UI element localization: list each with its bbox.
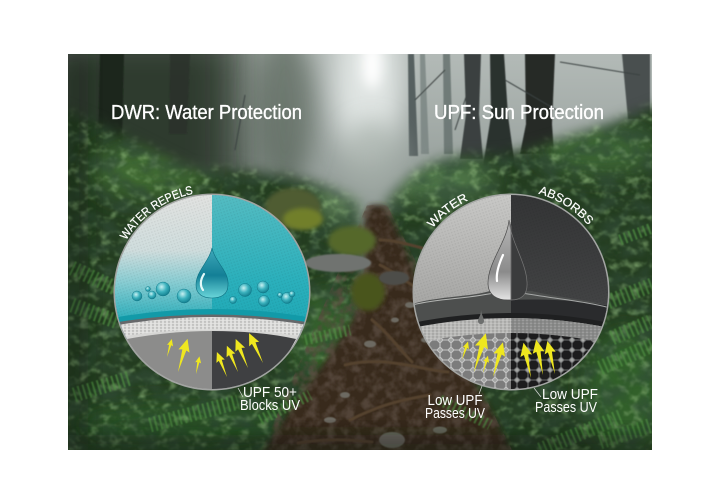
callout: Low UPF Passes UV right: Passes UV — [535, 399, 597, 416]
forest photograph background — [68, 54, 652, 450]
lighter green clusters — [90, 142, 210, 198]
fabric outer left light grey — [414, 195, 511, 286]
speckled middle layer — [420, 318, 602, 342]
UV arrows — [459, 331, 561, 379]
callout: Low UPF Passes UV right — [534, 386, 598, 416]
mossy boulders — [265, 188, 321, 228]
central haze — [340, 120, 404, 200]
UV arrows — [164, 331, 268, 379]
fabric outer right dark grey — [511, 192, 610, 312]
cell layer — [428, 333, 511, 389]
callout: Low UPF Passes UV right: Low UPF — [542, 386, 598, 403]
membrane layers — [112, 309, 313, 330]
dark forest left — [68, 54, 272, 178]
heading: DWR: DWR: Water Protection — [111, 102, 302, 124]
fabric outer right teal — [212, 192, 313, 339]
ferns — [72, 228, 652, 450]
panel: DWR fabric circle — [112, 192, 313, 395]
large water drop — [196, 248, 228, 298]
roots — [298, 240, 448, 443]
callout: UPF 50+ Blocks UV: Blocks UV — [240, 397, 300, 414]
wet layer band — [412, 291, 610, 322]
callout: Low UPF Passes UV left: Low UPF — [428, 392, 482, 409]
water beads — [132, 281, 295, 306]
foliage masses — [68, 98, 652, 450]
dirt trail — [262, 205, 512, 455]
curved label: WATER REPELS: WATER REPELS — [119, 186, 192, 239]
panel: UPF fabric circle — [412, 192, 610, 395]
fog glow — [321, 54, 408, 164]
water drop on fabric — [488, 220, 527, 300]
rocks — [324, 302, 447, 448]
vignette edges — [58, 54, 88, 450]
leak droplet — [478, 310, 484, 324]
curved label: ABSORBS: ABSORBS — [538, 186, 594, 224]
callout: UPF 50+ Blocks UV — [238, 384, 300, 414]
tree trunks — [98, 54, 650, 166]
inner layer — [126, 330, 298, 389]
callout: Low UPF Passes UV left: Passes UV — [425, 405, 485, 422]
heading: UPF: UPF: Sun Protection — [434, 102, 604, 124]
callout: UPF 50+ Blocks UV: UPF 50+ — [243, 384, 297, 401]
callout: Low UPF Passes UV left — [425, 386, 485, 422]
infographic canvas — [68, 54, 652, 450]
curved label: WATER: WATER — [426, 194, 468, 226]
fabric outer left pale — [112, 192, 212, 339]
